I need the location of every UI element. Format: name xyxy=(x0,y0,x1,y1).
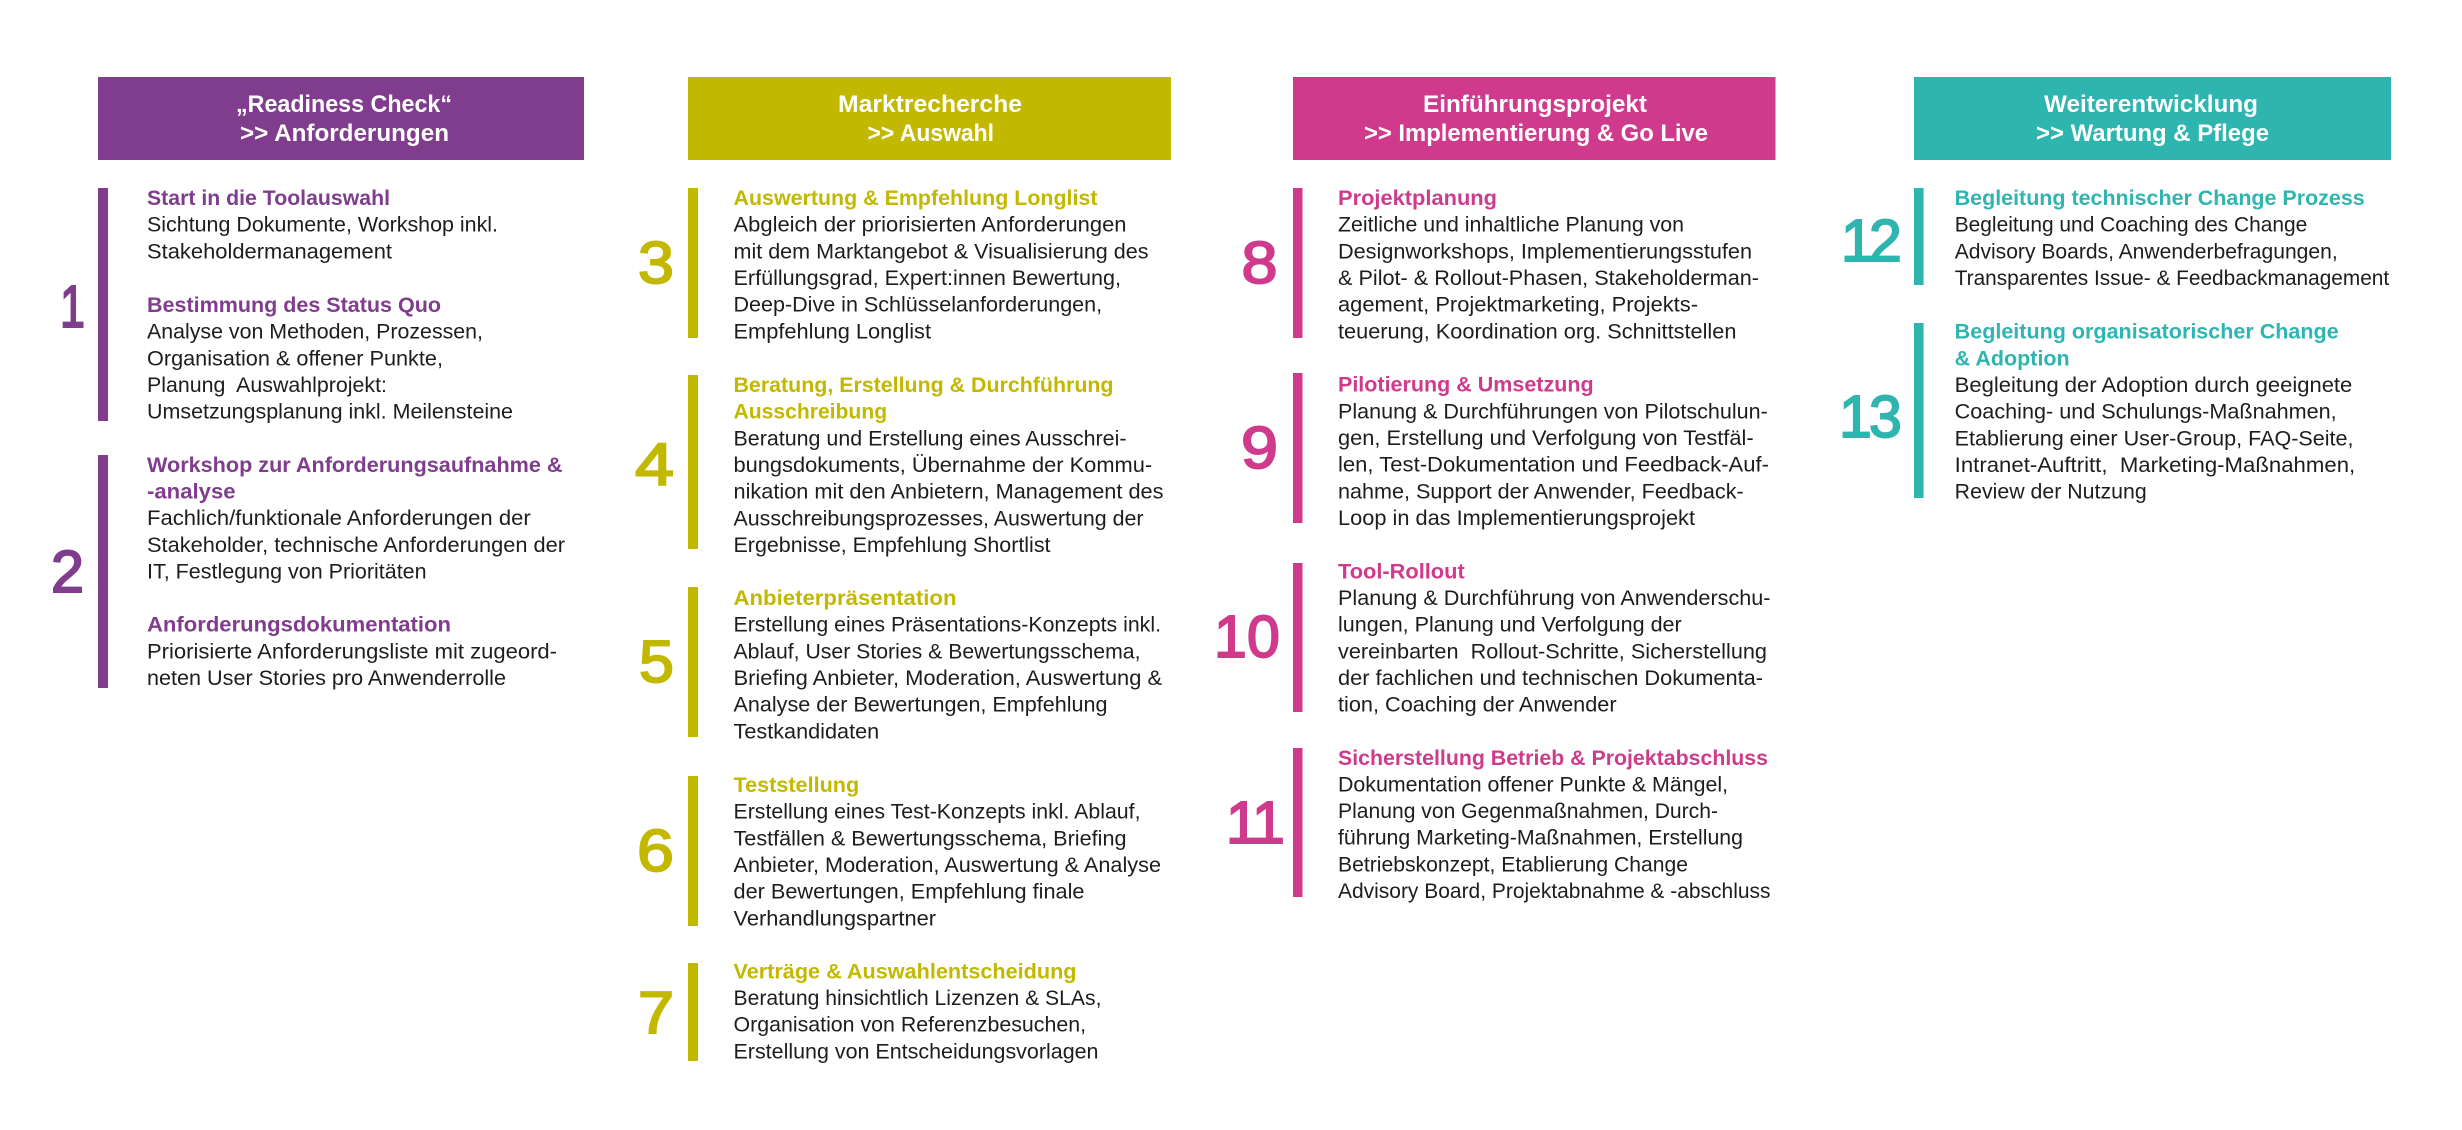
text: Begleitung organisatorischer Change und Adoption xyxy=(1955,374,2355,504)
number 6: 6 xyxy=(637,818,674,884)
text: Pilotierung und Umsetzung: gen, Erstellung und Verfolgung von Testfäl- xyxy=(1338,427,1754,450)
header: Weiterentwicklung: Weiterentwicklung xyxy=(2044,91,2258,118)
step 12 xyxy=(1841,187,2389,290)
text: Sicherstellung Betrieb und Projektabschluss: Dokumentation offener Punkte & Mängel, xyxy=(1338,773,1728,796)
text: Pilotierung und Umsetzung: len, Test-Dokumentation und Feedback-Auf- xyxy=(1338,454,1769,477)
text: Auswertung und Empfehlung Longlist: mit dem Marktangebot & Visualisierung des xyxy=(734,240,1148,263)
header: Einführungsprojekt: Einführungsprojekt xyxy=(1423,91,1647,118)
text: Anbieterpräsentation: Briefing Anbieter, Moderation, Auswertung & xyxy=(734,667,1162,690)
text: Projektplanung: Zeitliche und inhaltliche Planung von xyxy=(1338,214,1684,237)
text: Beratung, Erstellung und Durchführung Ausschreibung: nikation mit den Anbietern, Management des xyxy=(734,481,1164,504)
heading: Workshop zur Anforderungsaufnahme: -analyse xyxy=(147,480,236,504)
bar 3 xyxy=(688,188,698,338)
text: Sicherstellung Betrieb und Projektabschluss: Planung von Gegenmaßnahmen, Durch- xyxy=(1338,800,1718,823)
text: Teststellung xyxy=(734,801,1161,930)
header: Weiterentwicklung xyxy=(1914,77,2391,160)
bar 8 xyxy=(1293,188,1302,338)
text: Projektplanung: & Pilot- & Rollout-Phasen, Stakeholderman- xyxy=(1338,267,1759,290)
text: Begleitung organisatorischer Change und Adoption: Review der Nutzung xyxy=(1955,481,2147,504)
panel: Einführungsprojekt xyxy=(1214,77,1776,903)
heading: Begleitung organisatorischer Change und Adoption: & Adoption xyxy=(1955,347,2070,370)
text: Workshop zur Anforderungsaufnahme: Fachlich/funktionale Anforderungen der xyxy=(147,507,531,530)
text: Tool-Rollout xyxy=(1338,587,1770,717)
header: Readiness Check xyxy=(98,77,584,160)
text: Verträge und Auswahlentscheidung: Erstellung von Entscheidungsvorlagen xyxy=(734,1040,1098,1063)
text: Tool-Rollout: lungen, Planung und Verfolgung der xyxy=(1338,614,1682,637)
heading: Begleitung technischer Change Prozess: Begleitung technischer Change Prozess xyxy=(1955,187,2365,210)
bar 11 xyxy=(1293,748,1302,897)
heading: Anforderungsdokumentation: Anforderungsdokumentation xyxy=(147,614,451,637)
number 9: 9 xyxy=(1241,415,1278,481)
step 9 xyxy=(1241,373,1769,530)
text: Teststellung: der Bewertungen, Empfehlung finale xyxy=(734,881,1084,904)
header: Marktrecherche: Marktrecherche xyxy=(838,91,1022,118)
panel: Marktrecherche xyxy=(635,77,1171,1063)
step 4 xyxy=(635,374,1164,557)
step 5 xyxy=(639,587,1162,743)
text: Anbieterpräsentation xyxy=(734,614,1162,743)
text: Begleitung technischer Change Prozess: Advisory Boards, Anwenderbefragungen, xyxy=(1955,240,2338,263)
number 10: 10 xyxy=(1214,604,1280,670)
text: Beratung, Erstellung und Durchführung Ausschreibung: Ergebnisse, Empfehlung Shortlist xyxy=(734,534,1051,557)
header: Readiness Check: >> Anforderungen xyxy=(240,120,449,147)
text: Beratung, Erstellung und Durchführung Ausschreibung: bungsdokuments, Übernahme der Kommu- xyxy=(734,454,1152,477)
text: Begleitung organisatorischer Change und Adoption: Begleitung der Adoption durch geeignete xyxy=(1955,374,2352,397)
heading: Pilotierung und Umsetzung: Pilotierung & Umsetzung xyxy=(1338,374,1594,397)
step 10 xyxy=(1214,560,1770,717)
text: Sicherstellung Betrieb und Projektabschluss: Advisory Board, Projektabnahme & -abschluss xyxy=(1338,880,1770,903)
text: Projektplanung xyxy=(1338,214,1759,343)
text: Teststellung: Erstellung eines Test-Konzepts inkl. Ablauf, xyxy=(734,801,1140,824)
number 8: 8 xyxy=(1242,230,1278,296)
text: Bestimmung des Status Quo: Analyse von Methoden, Prozessen, xyxy=(147,321,483,344)
header: Einführungsprojekt: >> Implementierung & Go Live xyxy=(1364,120,1708,147)
text: Sicherstellung Betrieb und Projektabschluss: führung Marketing-Maßnahmen, Erstellung xyxy=(1338,827,1743,850)
text: Auswertung und Empfehlung Longlist xyxy=(734,214,1148,343)
text: Pilotierung und Umsetzung: Planung & Durchführungen von Pilotschulun- xyxy=(1338,400,1768,423)
text: Tool-Rollout: der fachlichen und technischen Dokumenta- xyxy=(1338,667,1763,690)
panel: Readiness Check xyxy=(51,77,584,690)
step 2 xyxy=(51,454,565,690)
text: Workshop zur Anforderungsaufnahme xyxy=(147,507,565,583)
bar 12 xyxy=(1914,188,1924,285)
bar 7 xyxy=(688,963,698,1061)
heading: Begleitung organisatorischer Change und Adoption: Begleitung organisatorischer Change xyxy=(1955,321,2339,344)
text: Workshop zur Anforderungsaufnahme: Stakeholder, technische Anforderungen der xyxy=(147,534,565,557)
text: Bestimmung des Status Quo xyxy=(147,321,513,424)
number 7: 7 xyxy=(638,980,674,1046)
heading: Beratung, Erstellung und Durchführung Ausschreibung: Ausschreibung xyxy=(734,401,887,424)
text: Auswertung und Empfehlung Longlist: Empfehlung Longlist xyxy=(734,320,931,343)
text: Anbieterpräsentation: Erstellung eines Präsentations-Konzepts inkl. xyxy=(734,614,1161,637)
text: Verträge und Auswahlentscheidung: Organisation von Referenzbesuchen, xyxy=(734,1014,1086,1037)
text: Pilotierung und Umsetzung xyxy=(1338,400,1769,530)
text: Pilotierung und Umsetzung: Loop in das Implementierungsprojekt xyxy=(1338,507,1695,530)
text: Beratung, Erstellung und Durchführung Ausschreibung: Beratung und Erstellung eines Ausschrei- xyxy=(734,427,1127,450)
header: Readiness Check: „Readiness Check“ xyxy=(236,91,452,118)
text: Projektplanung: agement, Projektmarketing, Projekts- xyxy=(1338,294,1698,317)
bar 2 xyxy=(98,455,108,688)
text: Projektplanung: Designworkshops, Implementierungsstufen xyxy=(1338,240,1752,263)
number 3: 3 xyxy=(638,230,674,296)
text: Verträge und Auswahlentscheidung: Beratung hinsichtlich Lizenzen & SLAs, xyxy=(734,987,1102,1010)
text: Anbieterpräsentation: Ablauf, User Stories & Bewertungsschema, xyxy=(734,640,1140,663)
step 7 xyxy=(638,960,1102,1063)
heading: Sicherstellung Betrieb und Projektabschluss: Sicherstellung Betrieb & Projektabschluss xyxy=(1338,747,1768,770)
step 1 xyxy=(60,187,513,424)
bar 9 xyxy=(1293,373,1302,523)
text: Tool-Rollout: Planung & Durchführung von Anwenderschu- xyxy=(1338,587,1770,610)
text: Bestimmung des Status Quo: Umsetzungsplanung inkl. Meilensteine xyxy=(147,401,513,424)
heading: Verträge und Auswahlentscheidung: Verträge & Auswahlentscheidung xyxy=(734,960,1076,983)
text: Start in die Toolauswahl xyxy=(147,214,498,263)
header: Einführungsprojekt xyxy=(1293,77,1776,160)
number 5: 5 xyxy=(639,629,674,695)
text: Projektplanung: teuerung, Koordination org. Schnittstellen xyxy=(1338,320,1736,343)
text: Auswertung und Empfehlung Longlist: Deep-Dive in Schlüsselanforderungen, xyxy=(734,294,1102,317)
step 11 xyxy=(1226,747,1770,903)
heading: Auswertung und Empfehlung Longlist: Auswertung & Empfehlung Longlist xyxy=(734,187,1098,210)
number 11: 11 xyxy=(1226,790,1285,856)
heading: Beratung, Erstellung und Durchführung Ausschreibung: Beratung, Erstellung & Durchführung xyxy=(734,374,1114,397)
text: Beratung, Erstellung und Durchführung Ausschreibung: Ausschreibungsprozesses, Auswertung der xyxy=(734,507,1144,530)
text: Sicherstellung Betrieb und Projektabschluss: Betriebskonzept, Etablierung Change xyxy=(1338,853,1688,876)
text: Begleitung technischer Change Prozess: Begleitung und Coaching des Change xyxy=(1955,214,2307,237)
heading: Teststellung: Teststellung xyxy=(734,774,859,797)
bar 1 xyxy=(98,188,108,421)
text: Begleitung technischer Change Prozess xyxy=(1955,214,2389,290)
text: Begleitung organisatorischer Change und Adoption: Coaching- und Schulungs-Maßnahmen, xyxy=(1955,401,2337,424)
bar 4 xyxy=(688,375,698,549)
heading: Anbieterpräsentation: Anbieterpräsentation xyxy=(734,587,956,610)
text: Start in die Toolauswahl: Stakeholdermanagement xyxy=(147,240,392,263)
number 1: 1 xyxy=(60,274,85,340)
heading: Begleitung organisatorischer Change und Adoption xyxy=(1955,321,2339,370)
text: Workshop zur Anforderungsaufnahme: IT, Festlegung von Prioritäten xyxy=(147,560,427,583)
text: Begleitung organisatorischer Change und Adoption: Intranet-Auftritt, Marketing-Maßnahmen, xyxy=(1955,454,2355,477)
text: Anforderungsdokumentation: Priorisierte Anforderungsliste mit zugeord- xyxy=(147,640,557,663)
text: Teststellung: Testfällen & Bewertungsschema, Briefing xyxy=(734,827,1126,850)
bar 10 xyxy=(1293,563,1302,712)
text: Auswertung und Empfehlung Longlist: Abgleich der priorisierten Anforderungen xyxy=(734,214,1126,237)
header: Marktrecherche: >> Auswahl xyxy=(868,120,994,147)
heading: Start in die Toolauswahl: Start in die Toolauswahl xyxy=(147,187,390,210)
header: Marktrecherche xyxy=(688,77,1171,160)
heading: Workshop zur Anforderungsaufnahme xyxy=(147,454,562,504)
text: Tool-Rollout: tion, Coaching der Anwender xyxy=(1338,694,1617,717)
text: Teststellung: Anbieter, Moderation, Auswertung & Analyse xyxy=(734,854,1161,877)
text: Teststellung: Verhandlungspartner xyxy=(734,907,936,930)
text: Start in die Toolauswahl: Sichtung Dokumente, Workshop inkl. xyxy=(147,214,498,237)
heading: Bestimmung des Status Quo: Bestimmung des Status Quo xyxy=(147,294,441,317)
text: Anforderungsdokumentation xyxy=(147,640,557,690)
text: Bestimmung des Status Quo: Planung Auswahlprojekt: xyxy=(147,374,387,397)
text: Begleitung technischer Change Prozess: Transparentes Issue- & Feedbackmanagement xyxy=(1955,267,2389,290)
text: Sicherstellung Betrieb und Projektabschluss xyxy=(1338,773,1770,903)
number 4: 4 xyxy=(635,432,674,498)
text: Verträge und Auswahlentscheidung xyxy=(734,987,1102,1063)
number 2: 2 xyxy=(51,539,84,605)
step 13 xyxy=(1839,321,2355,504)
text: Anforderungsdokumentation: neten User Stories pro Anwenderrolle xyxy=(147,667,506,690)
text: Auswertung und Empfehlung Longlist: Erfüllungsgrad, Expert:innen Bewertung, xyxy=(734,267,1121,290)
bar 5 xyxy=(688,587,698,737)
text: Pilotierung und Umsetzung: nahme, Support der Anwender, Feedback- xyxy=(1338,480,1744,503)
number 12: 12 xyxy=(1841,208,1902,274)
header: Weiterentwicklung: >> Wartung & Pflege xyxy=(2036,120,2269,147)
text: Beratung, Erstellung und Durchführung Ausschreibung xyxy=(734,427,1164,557)
step 6 xyxy=(637,774,1161,930)
step 3 xyxy=(638,187,1148,343)
text: Anbieterpräsentation: Testkandidaten xyxy=(734,720,879,743)
bar 13 xyxy=(1914,323,1924,498)
step 8 xyxy=(1242,187,1759,343)
heading: Tool-Rollout: Tool-Rollout xyxy=(1338,560,1465,583)
heading: Workshop zur Anforderungsaufnahme: Workshop zur Anforderungsaufnahme & xyxy=(147,454,562,477)
text: Bestimmung des Status Quo: Organisation & offener Punkte, xyxy=(147,347,443,370)
heading: Projektplanung: Projektplanung xyxy=(1338,187,1497,210)
panel: Weiterentwicklung xyxy=(1839,77,2391,504)
text: Anbieterpräsentation: Analyse der Bewertungen, Empfehlung xyxy=(734,694,1108,717)
text: Tool-Rollout: vereinbarten Rollout-Schritte, Sicherstellung xyxy=(1338,640,1767,663)
text: Begleitung organisatorischer Change und Adoption: Etablierung einer User-Group, FAQ-Seite, xyxy=(1955,427,2354,450)
bar 6 xyxy=(688,776,698,926)
number 13: 13 xyxy=(1839,384,1902,450)
heading: Beratung, Erstellung und Durchführung Ausschreibung xyxy=(734,374,1114,424)
